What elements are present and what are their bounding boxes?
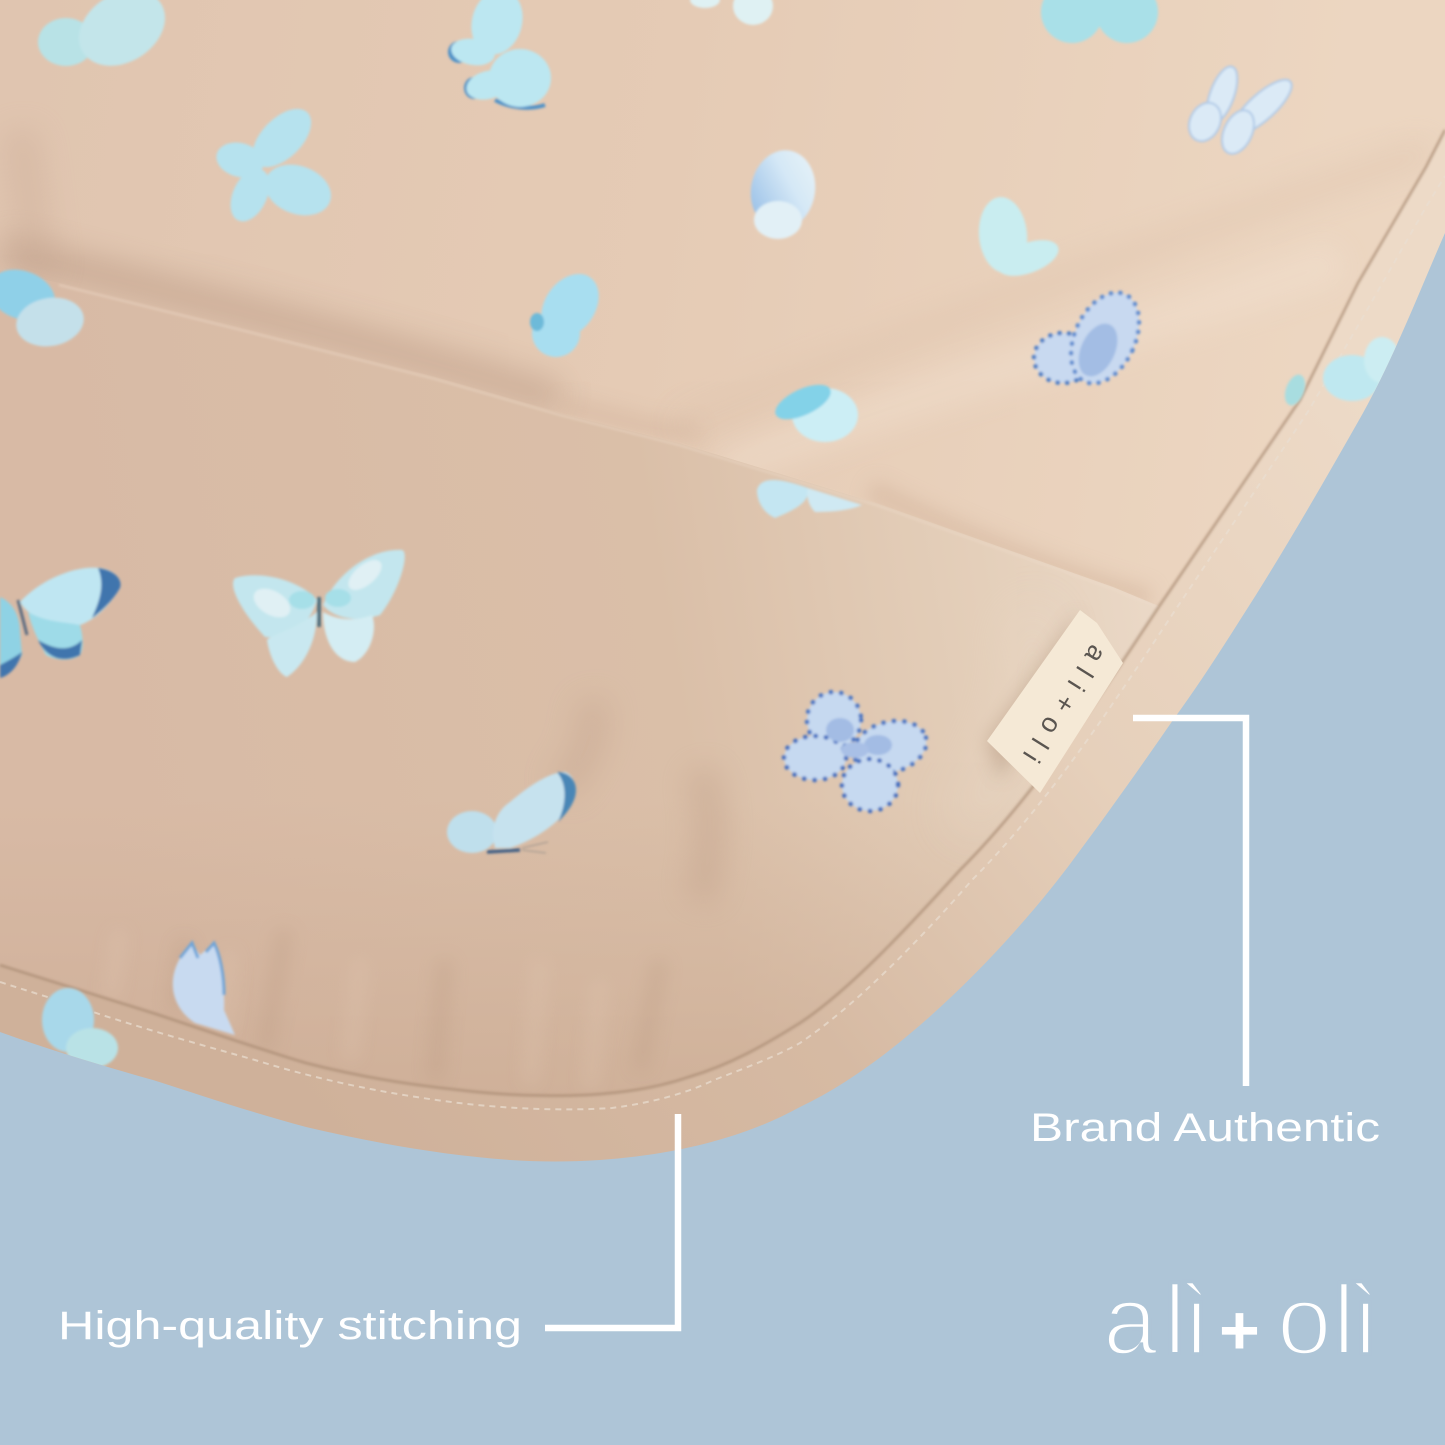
pocket crease highlight [60, 284, 738, 463]
butterfly: left dark-edged [0, 568, 121, 678]
logo: + [1219, 1291, 1260, 1369]
butterfly: tucked in pocket [757, 480, 862, 518]
brand tag shadow [984, 620, 1072, 776]
butterfly: top centre [448, 0, 551, 108]
butterfly: patterned blue upper [1030, 289, 1143, 387]
butterfly: large watercolour [233, 550, 405, 677]
butterfly: top middle cut off [690, 0, 773, 25]
butterfly: lower centre teal [770, 378, 858, 442]
butterfly: left edge over pocket [0, 261, 88, 352]
butterfly: bottom left on binding [42, 988, 118, 1068]
butterfly: on binding [1281, 337, 1400, 408]
tag text: ali+oli [1017, 640, 1112, 768]
butterfly: pale blue-edged [1186, 64, 1294, 156]
butterfly: middle teal side view [528, 272, 600, 358]
butterfly: side view [447, 772, 576, 853]
inner seam shadow [0, 130, 1445, 1096]
butterfly: top right cut off [1040, 0, 1160, 44]
butterfly: patterned blue lower [784, 692, 932, 811]
butterfly: closed teal [978, 196, 1060, 277]
bib binding edge [0, 130, 1445, 1162]
butterfly: top left [37, 0, 166, 67]
butterfly: upper left teal [215, 108, 332, 222]
butterfly: closed blue [750, 149, 816, 240]
pocket panel [0, 428, 716, 1077]
logo: olì [1277, 1265, 1379, 1375]
brand tag [987, 610, 1123, 793]
logo: alì [1103, 1265, 1210, 1375]
callout line: stitching [545, 1114, 678, 1328]
butterfly: bottom pale [173, 943, 235, 1035]
upper panel [0, 0, 1434, 605]
stitching [0, 392, 1320, 1110]
callout label: brand authentic: Brand Authentic [1030, 1106, 1380, 1150]
callout line: brand authentic [1133, 718, 1246, 1086]
callout label: stitching: High-quality stitching [58, 1304, 522, 1348]
